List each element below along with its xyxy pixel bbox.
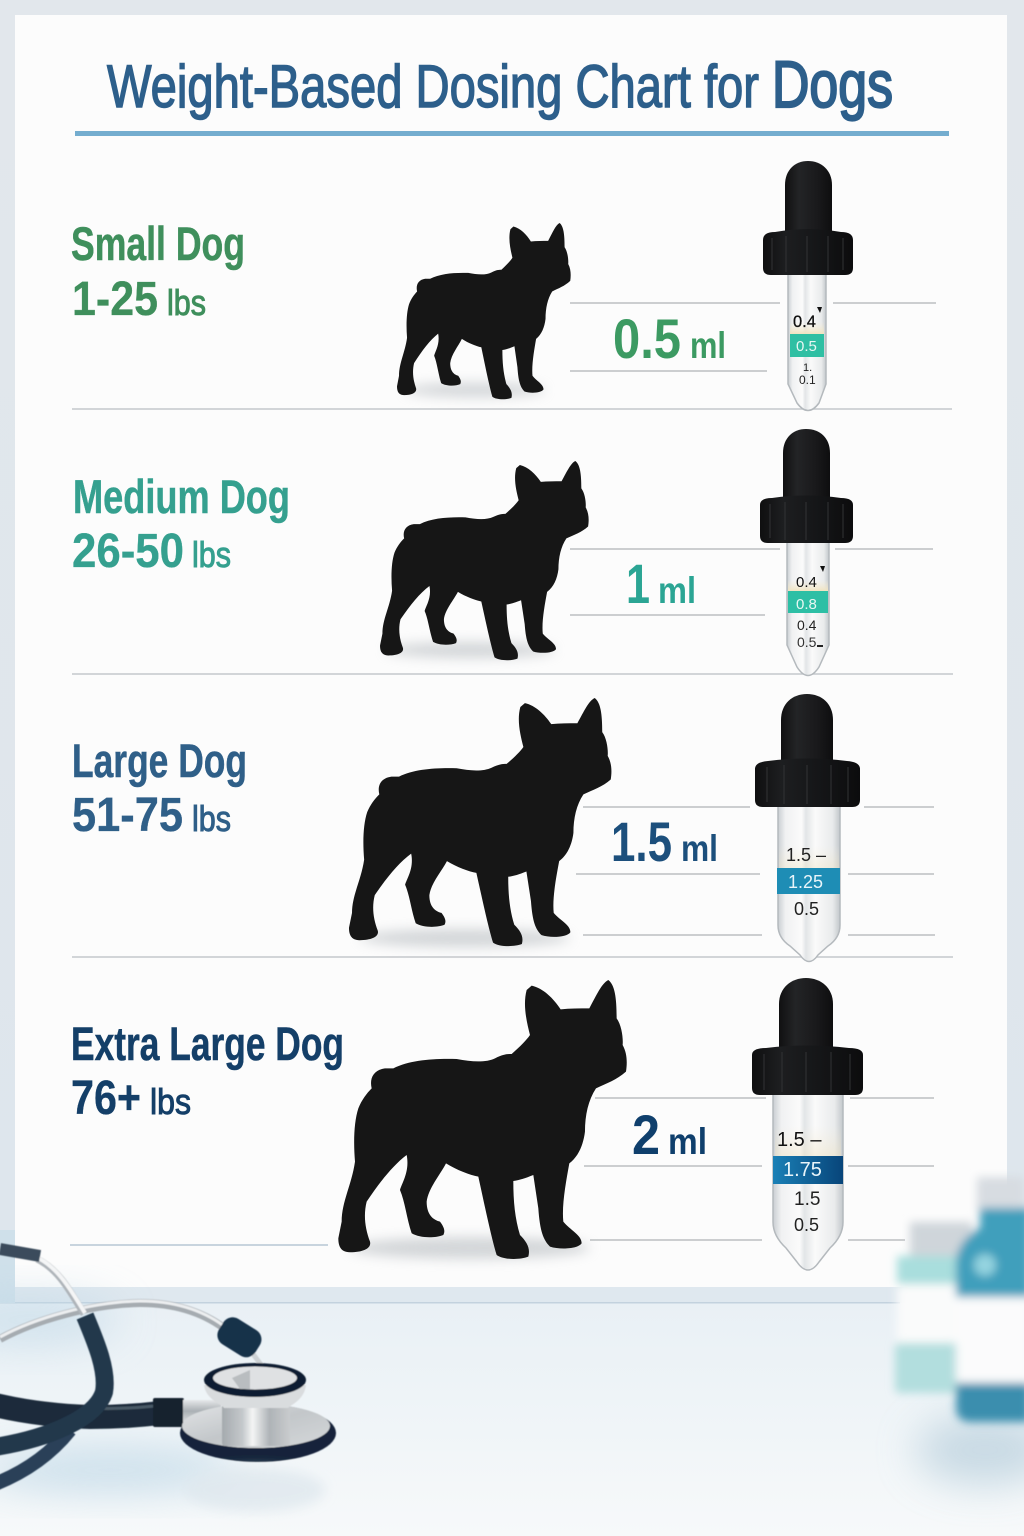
dog silhouette: medium: [380, 461, 589, 660]
label: medium dog: [72, 470, 290, 578]
stethoscope: [0, 1249, 336, 1512]
label: large dog: Large Dog: [72, 734, 247, 787]
dose: 1.5 ml: 1.5: [611, 810, 672, 873]
row: large dog: [72, 694, 953, 962]
dropper: 1 ml: 0.8: [796, 596, 817, 613]
dose: 2 ml: [632, 1103, 707, 1166]
guide lines: [72, 807, 953, 957]
dropper: 0.5 ml: [763, 161, 853, 410]
label: small dog: 1-25: [72, 273, 158, 326]
dropper: 0.5 ml: 0.5: [796, 338, 817, 355]
row: medium dog: [72, 429, 953, 676]
dog silhouette: small: [397, 223, 571, 399]
label: small dog: Small Dog: [71, 217, 245, 270]
bottle: light teal: [895, 1222, 972, 1393]
row: extra large dog: [70, 978, 934, 1270]
label: extra large dog: 76+: [71, 1072, 141, 1125]
dose: 2 ml: ml: [668, 1121, 707, 1162]
reflection: [185, 1468, 325, 1512]
dose: 2 ml: 2: [632, 1103, 660, 1166]
dropper: 2 ml: 1.75: [783, 1159, 822, 1181]
title rule: [75, 131, 949, 136]
blurred medicine bottles: [895, 1177, 1024, 1422]
dog silhouette: extra large: [338, 980, 627, 1259]
dropper: 1 ml: 0.4: [797, 617, 817, 633]
bottle: dark teal: [956, 1177, 1024, 1422]
dropper: 1 ml: 0.4: [796, 574, 817, 591]
guide lines: [72, 549, 953, 674]
label: medium dog: 26-50: [72, 525, 184, 578]
title: Dogs: [772, 47, 893, 121]
dropper: 1.5 ml: [755, 694, 860, 962]
dog silhouette: large: [349, 698, 611, 947]
dose: 0.5 ml: ml: [690, 325, 726, 366]
dose: 0.5 ml: [613, 307, 726, 370]
desk surface: [0, 1230, 1024, 1536]
row: small dog: [71, 161, 952, 410]
dropper: 1 ml: 0.5: [797, 634, 817, 650]
dropper: 2 ml: 1.5 –: [777, 1129, 822, 1151]
dose: 1.5 ml: ml: [681, 828, 718, 869]
dropper: 1.5 ml: 1.25: [788, 872, 823, 892]
dose: 1 ml: 1: [626, 552, 650, 615]
dropper: 2 ml: [752, 978, 863, 1270]
tubing: [0, 1316, 160, 1484]
dose: 0.5 ml: 0.5: [613, 307, 681, 370]
dropper: 0.5 ml: 0.4: [793, 313, 816, 331]
label: small dog: lbs: [167, 282, 206, 323]
dropper: 2 ml: 1.5: [794, 1189, 820, 1210]
title: Weight-Based Dosing Chart for: [107, 53, 759, 120]
ear tip: [213, 1313, 266, 1361]
label: small dog: [71, 217, 245, 326]
guide lines: [72, 303, 952, 409]
guide lines: [70, 1098, 934, 1245]
label: large dog: lbs: [192, 798, 231, 839]
dropper: 2 ml: 0.5: [794, 1215, 819, 1235]
dose: 1 ml: [626, 552, 696, 615]
chest piece: [180, 1404, 336, 1462]
connector: [153, 1398, 184, 1427]
dropper: 0.5 ml: 1.: [803, 362, 812, 374]
label: medium dog: lbs: [192, 534, 231, 575]
label: extra large dog: [71, 1017, 344, 1125]
label: large dog: 51-75: [72, 789, 183, 842]
dropper: 1.5 ml: 0.5: [794, 899, 819, 919]
dropper: 1.5 ml: 1.5 –: [786, 845, 826, 865]
label: extra large dog: lbs: [150, 1081, 191, 1122]
label: medium dog: Medium Dog: [73, 470, 290, 523]
dropper: 0.5 ml: 0.1: [799, 373, 816, 387]
label: extra large dog: Extra Large Dog: [71, 1017, 344, 1070]
label: large dog: [72, 734, 247, 842]
ear tube: [0, 1249, 262, 1366]
dose: 1 ml: ml: [658, 570, 696, 611]
dropper: 1 ml: [760, 429, 853, 676]
